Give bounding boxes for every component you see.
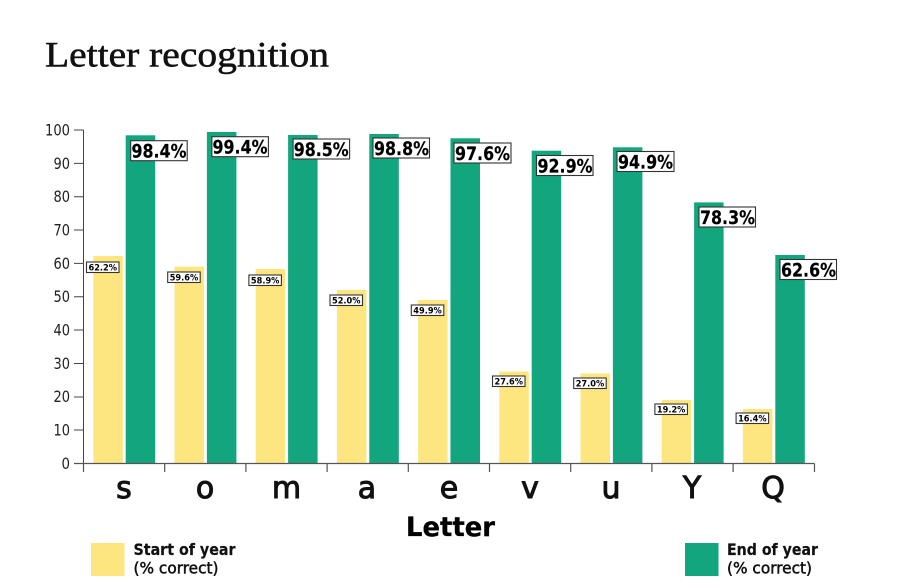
- legend: start of year: (% correct): [134, 558, 218, 578]
- end-of-year value labels: 98.8%: [374, 139, 429, 160]
- x axis letters: o: [196, 471, 214, 506]
- bars: end of year: [126, 132, 805, 464]
- end-of-year value labels: 92.9%: [538, 156, 592, 178]
- start-of-year value labels: 27.0%: [576, 380, 604, 390]
- start-of-year value labels: 52.0%: [332, 297, 360, 307]
- y axis: 50: [54, 287, 70, 306]
- end-of-year value labels: 99.4%: [212, 138, 268, 158]
- x axis letters: s: [116, 471, 132, 506]
- end-of-year value labels: 78.3%: [700, 208, 755, 229]
- start-of-year value labels: 58.9%: [251, 277, 279, 287]
- legend: start of year: Start of year: [134, 540, 236, 559]
- start-of-year value labels: [86, 262, 769, 425]
- end-of-year value labels: 62.6%: [781, 260, 836, 282]
- start-of-year value labels: 27.6%: [494, 378, 523, 388]
- title: Letter recognition: [45, 34, 329, 74]
- x axis letters: Q: [761, 471, 785, 506]
- x axis letters: u: [601, 471, 621, 506]
- bars: start of year: [93, 256, 772, 464]
- y axis: 0: [62, 454, 70, 473]
- y axis: 20: [54, 387, 70, 406]
- x axis letters: m: [272, 471, 301, 506]
- x axis letters: e: [440, 471, 458, 506]
- y axis: 90: [54, 154, 70, 173]
- y axis: 100: [45, 120, 70, 140]
- y axis: 40: [54, 320, 70, 340]
- end-of-year value labels: 97.6%: [455, 144, 510, 165]
- start-of-year value labels: 59.6%: [170, 274, 198, 284]
- start-of-year value labels: 19.2%: [657, 406, 685, 416]
- start-of-year value labels: 62.2%: [88, 264, 117, 274]
- x axis letters: [116, 471, 785, 506]
- legend: end of year: (% correct): [727, 558, 812, 578]
- legend: end of year: End of year: [727, 540, 818, 559]
- end-of-year value labels: 98.4%: [132, 142, 186, 162]
- x axis title: Letter: [406, 512, 496, 543]
- y axis: 70: [54, 220, 70, 240]
- y axis: 30: [54, 354, 70, 373]
- y axis: 80: [54, 187, 70, 206]
- y axis: [45, 120, 84, 473]
- start-of-year value labels: 49.9%: [413, 307, 442, 317]
- x axis letters: a: [358, 471, 376, 506]
- legend: start of year: [91, 540, 236, 578]
- x axis: [74, 464, 814, 472]
- end-of-year value labels: 94.9%: [618, 152, 673, 174]
- x axis letters: Y: [682, 471, 702, 506]
- y axis: 10: [54, 420, 70, 440]
- end-of-year value labels: [131, 137, 836, 282]
- x axis letters: v: [521, 471, 539, 506]
- end-of-year value labels: 98.5%: [294, 140, 349, 161]
- start-of-year value labels: 16.4%: [738, 415, 767, 425]
- legend: end of year: [685, 540, 818, 578]
- y axis: 60: [54, 254, 70, 273]
